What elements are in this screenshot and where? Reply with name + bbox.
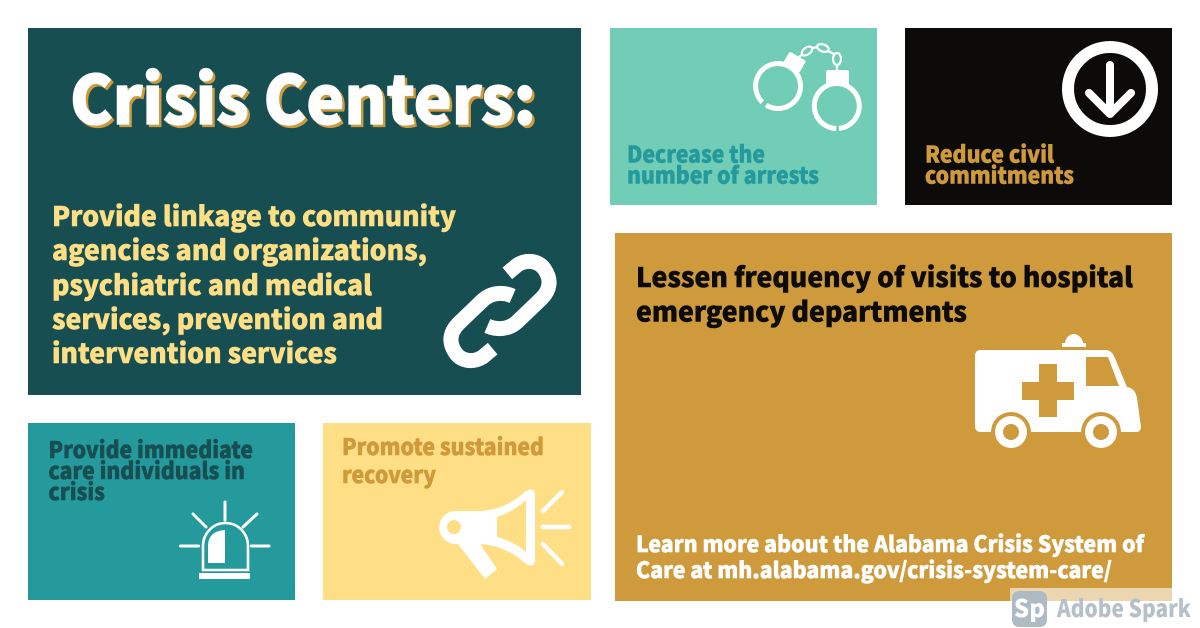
panel: lessen hospital visits xyxy=(615,233,1172,601)
panel: decrease arrests xyxy=(610,28,877,205)
text: provide immediate care: crisis xyxy=(48,473,105,507)
icon: handcuffs xyxy=(756,43,859,129)
panel: crisis centers main xyxy=(28,28,581,395)
text: promote sustained recovery: recovery xyxy=(342,456,436,490)
text: reduce civil commitments: Reduce civil xyxy=(925,136,1054,170)
icon: siren xyxy=(180,502,269,579)
title: Crisis Centers: xyxy=(70,47,536,144)
text: promote sustained recovery xyxy=(342,428,544,490)
text: learn more link: Care at mh.alabama.gov/crisis-system-care/ xyxy=(636,553,1112,585)
text block: linkage description: intervention services xyxy=(52,332,337,371)
text block: linkage description: Provide linkage to community xyxy=(52,195,456,234)
text block: linkage description: psychiatric and medical xyxy=(52,264,372,303)
text: reduce civil commitments xyxy=(925,136,1074,190)
text block: linkage description: services, prevention and xyxy=(52,298,383,337)
title shadow: Crisis Centers: xyxy=(72,50,538,146)
panel: immediate care xyxy=(28,423,295,600)
text: decrease the number of arrests: Decrease the xyxy=(627,136,765,170)
panel: reduce civil commitments xyxy=(905,28,1172,205)
text block: linkage description: agencies and organizations, xyxy=(52,229,427,268)
heading: lessen frequency of visits xyxy=(636,256,1133,330)
icon: down arrow in circle xyxy=(1068,47,1152,131)
text block: linkage description xyxy=(52,195,456,371)
panel: sustained recovery xyxy=(323,423,591,600)
heading: lessen frequency of visits: Lessen frequency of visits to hospital xyxy=(636,256,1133,295)
text: promote sustained recovery: Promote sustained xyxy=(342,428,544,462)
icon: megaphone xyxy=(439,489,569,579)
heading: lessen frequency of visits: emergency departments xyxy=(636,290,967,330)
watermark logo: Sp xyxy=(1014,589,1045,624)
text: provide immediate care: care individuals in xyxy=(48,452,245,486)
text: decrease the number of arrests: number of arrests xyxy=(627,156,819,190)
text: reduce civil commitments: commitments xyxy=(925,156,1074,190)
text: provide immediate care: Provide immediate xyxy=(48,431,253,465)
icon: chain link xyxy=(451,261,549,361)
text: learn more link xyxy=(636,527,1145,585)
watermark: Adobe Spark xyxy=(1010,588,1192,627)
text: decrease the number of arrests xyxy=(627,136,819,190)
text: learn more link: Learn more about the Alabama Crisis System of xyxy=(636,527,1145,559)
icon: ambulance xyxy=(975,334,1141,452)
text: provide immediate care xyxy=(48,431,253,507)
